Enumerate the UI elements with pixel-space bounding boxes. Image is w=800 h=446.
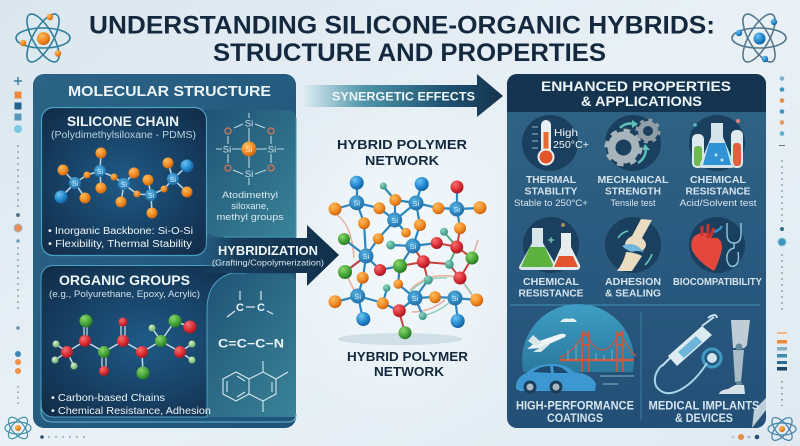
heading: hybrid polymer network bottom: NETWORK (374, 364, 445, 379)
panel: siloxane detail (200, 110, 296, 237)
text: organic bullet points (51, 392, 211, 417)
panel: organic detail (200, 274, 296, 417)
molecule: silicone chain: Si (72, 181, 79, 188)
heading: hybrid polymer network top: NETWORK (365, 153, 440, 168)
subheading: PDMS: (Polydimethylsiloxane - PDMS) (51, 130, 196, 141)
molecule: silicone chain (54, 148, 194, 218)
heading: hybrid polymer network bottom: HYBRID POLYMER (347, 349, 469, 364)
label: chemical resistance top: Acid/Solvent test (680, 198, 757, 208)
heading: hybrid polymer network top: HYBRID POLYMER (337, 137, 468, 152)
label: chemical resistance top: RESISTANCE (686, 186, 750, 198)
diagram: hybrid polymer network: Si (453, 205, 460, 214)
text: organic bullet points: • Carbon-based Chains (51, 392, 165, 404)
right side decoration (777, 76, 787, 406)
heading: enhanced properties: & APPLICATIONS (581, 94, 702, 109)
arrow: synergetic effects (304, 74, 503, 117)
icon: chemical flasks pair (519, 217, 580, 273)
left bottom atom (5, 414, 31, 442)
icon: gears (605, 115, 661, 171)
molecule: organic chain (52, 314, 196, 380)
panel: silicone chain (42, 108, 206, 256)
label: mechanical strength (598, 174, 669, 208)
diagram: hybrid polymer network: Si (413, 199, 420, 208)
label: adhesion and sealing (605, 276, 661, 300)
text: silicone bullet points: • Inorganic Backbone: Si-O-Si (48, 226, 193, 237)
illustration: coatings scene (516, 304, 636, 394)
diagram: hybrid polymer network: Si (363, 252, 370, 261)
subheading: examples: (e.g., Polyurethane, Epoxy, Acrylic) (49, 289, 200, 300)
molecule: silicone chain: Si (148, 193, 155, 200)
label: medical implants and devices (648, 400, 760, 425)
icon: knee joint (605, 217, 661, 273)
label: thermal stability: THERMAL (526, 174, 577, 186)
panel: enhanced properties (507, 74, 766, 428)
heading: enhanced properties: ENHANCED PROPERTIES (541, 79, 731, 94)
label: biocompatibility: BIOCOMPATIBILITY (673, 276, 762, 288)
label: adhesion and sealing: ADHESION (605, 276, 661, 288)
diagram: siloxane ring (216, 113, 284, 185)
diagram: hybrid polymer network (328, 176, 486, 345)
heading: hybrid polymer network top (337, 137, 468, 168)
right bottom atom (768, 414, 796, 444)
heading: molecular structure: MOLECULAR STRUCTURE (68, 83, 271, 100)
icon: heart and stethoscope (689, 217, 745, 273)
text: silicone bullet points: • Flexibility, Thermal Stability (48, 239, 192, 250)
arrow: hybridization: HYBRIDIZATION (218, 244, 318, 258)
panel: organic groups (41, 266, 296, 422)
diagram: hybrid polymer network: Si (354, 292, 361, 301)
heading: silicone chain: SILICONE CHAIN (67, 114, 179, 129)
panel: molecular structure (33, 74, 296, 428)
title (89, 12, 715, 67)
caption: siloxane: methyl groups (216, 212, 284, 223)
illustration: medical devices (655, 315, 750, 394)
label: thermal stability: STABILITY (524, 186, 578, 198)
pagination dots right (732, 434, 759, 440)
diagram: hybrid polymer network: Si (410, 242, 417, 251)
title: UNDERSTANDING SILICONE-ORGANIC HYBRIDS: (89, 12, 715, 40)
icon: chemical flasks (689, 115, 745, 171)
caption: siloxane (216, 190, 284, 223)
caption: siloxane: siloxane, (231, 201, 269, 212)
label: thermal stability (514, 174, 588, 208)
label: medical implants and devices: MEDICAL IMPLANTS (648, 400, 760, 412)
label: chemical resistance lower: CHEMICAL (523, 276, 580, 288)
molecule: silicone chain: Si (170, 177, 177, 184)
diagram: hybrid polymer network: Si (391, 216, 398, 225)
text: silicone bullet points (48, 226, 193, 250)
molecule: silicone chain: Si (97, 169, 104, 176)
diagram: hybrid polymer network: Si (353, 198, 360, 208)
pagination dots left (40, 435, 85, 439)
text: organic bullet points: • Chemical Resistance, Adhesion (51, 405, 211, 417)
heading: enhanced properties (541, 79, 731, 109)
arrow: hybridization: (Grafting/Copolymerization) (212, 258, 324, 268)
left side decoration (14, 77, 22, 406)
diagram: hybrid polymer network: Si (452, 294, 459, 303)
diagram: siloxane ring: Si (223, 144, 231, 156)
diagram: siloxane ring: Si (245, 118, 253, 130)
label: high-performance coatings: COATINGS (547, 413, 603, 425)
arrow: hybridization (200, 225, 339, 286)
label: mechanical strength: MECHANICAL (598, 174, 669, 186)
diagram: carbon formulas: C (236, 302, 244, 314)
label: medical implants and devices: & DEVICES (675, 413, 733, 425)
label: chemical resistance top (680, 174, 757, 208)
icon: thermometer: 250°C+ (553, 139, 589, 151)
label: high-performance coatings (516, 400, 634, 425)
diagram: carbon formulas (218, 291, 288, 412)
heading: organic groups: ORGANIC GROUPS (59, 272, 190, 288)
title: STRUCTURE AND PROPERTIES (213, 39, 606, 67)
label: mechanical strength: Tensile test (610, 198, 656, 208)
diagram: siloxane ring: Si (245, 169, 253, 180)
diagram: carbon formulas: C=C−C−N (218, 336, 284, 350)
icon: thermometer: High (554, 127, 578, 139)
label: high-performance coatings: HIGH-PERFORMANCE (516, 400, 634, 412)
icon: blue atom top right (732, 10, 786, 66)
diagram: carbon formulas: C (257, 302, 265, 314)
label: adhesion and sealing: & SEALING (605, 288, 661, 300)
label: chemical resistance lower: RESISTANCE (518, 288, 584, 300)
label: chemical resistance top: CHEMICAL (690, 174, 747, 186)
molecule: silicone chain: Si (121, 182, 128, 189)
arrow: synergetic effects: SYNERGETIC EFFECTS (332, 92, 475, 104)
caption: siloxane: Atodimethyl (222, 190, 278, 201)
diagram: siloxane ring: Si (245, 145, 253, 154)
label: thermal stability: Stable to 250°C+ (514, 198, 588, 208)
diagram: hybrid polymer network: Si (412, 294, 419, 303)
label: mechanical strength: STRENGTH (605, 186, 661, 198)
icon: thermometer (522, 115, 589, 171)
icon: orange atom top left (16, 10, 70, 66)
diagram: siloxane ring: Si (268, 144, 276, 156)
label: chemical resistance lower (518, 276, 584, 300)
heading: hybrid polymer network bottom (347, 349, 469, 379)
